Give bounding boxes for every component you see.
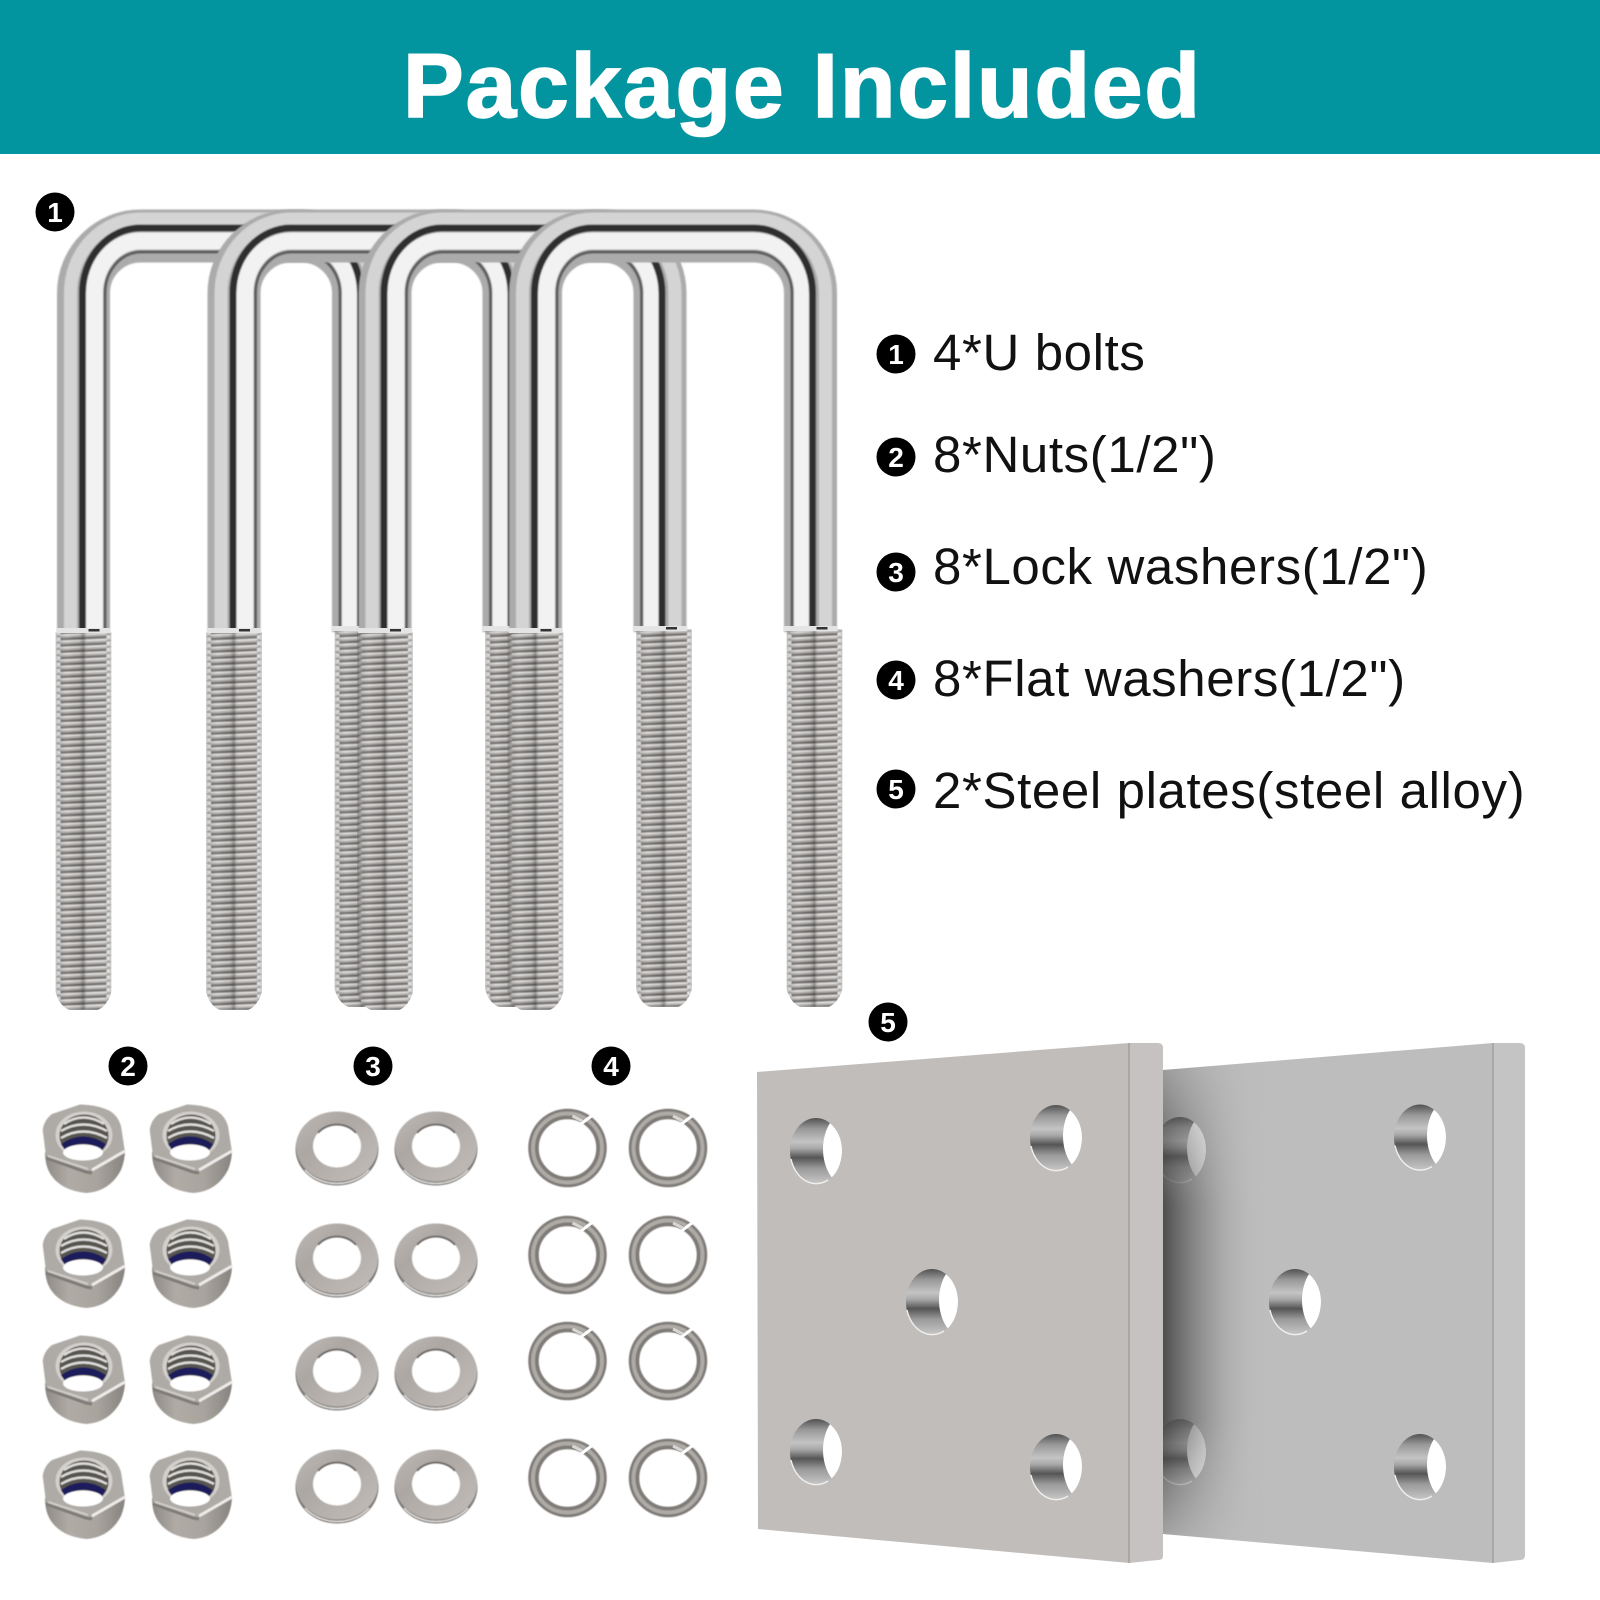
steel plate 1 — [757, 1043, 1163, 1563]
list item 3: 8*Lock washers(1/2") — [933, 538, 1428, 595]
badge: 5 on plates — [868, 1002, 908, 1042]
badge: 2 on nuts: 2 — [120, 1051, 136, 1082]
list item 4: 8*Flat washers(1/2") — [933, 650, 1406, 707]
U bolt 4 — [508, 219, 842, 1010]
title: Package Included — [403, 36, 1200, 137]
list item 5: 5 — [888, 774, 904, 805]
list item 4: 4 — [888, 665, 904, 696]
flat washers group — [296, 1112, 478, 1524]
steel plate 2 — [1154, 1043, 1525, 1563]
U bolts group — [56, 219, 842, 1010]
U bolt 3 — [357, 219, 692, 1010]
badge: 4 on lock washers — [592, 1046, 630, 1086]
list item 1: 1 — [888, 339, 904, 370]
badge: 2 on nuts — [108, 1046, 148, 1086]
U bolt 1 — [56, 219, 390, 1010]
badge: 4 on lock washers: 4 — [603, 1051, 619, 1082]
list item 2: 8*Nuts(1/2") — [933, 426, 1216, 483]
badge: 1 on U bolts: 1 — [47, 197, 63, 228]
nuts group — [43, 1104, 232, 1539]
U bolt 2 — [206, 219, 541, 1010]
list item 5: 2*Steel plates(steel alloy) — [933, 762, 1525, 819]
list item 3: 3 — [888, 557, 904, 588]
badge: 5 on plates: 5 — [880, 1007, 896, 1038]
badge: 3 on flat washers: 3 — [365, 1051, 381, 1082]
parts list — [876, 324, 1525, 819]
lock washers group — [533, 1113, 702, 1512]
header banner — [0, 0, 1600, 154]
badge: 3 on flat washers — [354, 1046, 392, 1086]
list item 2: 2 — [888, 442, 904, 473]
list item 1: 4*U bolts — [933, 324, 1146, 381]
badge: 1 on U bolts — [36, 192, 74, 232]
